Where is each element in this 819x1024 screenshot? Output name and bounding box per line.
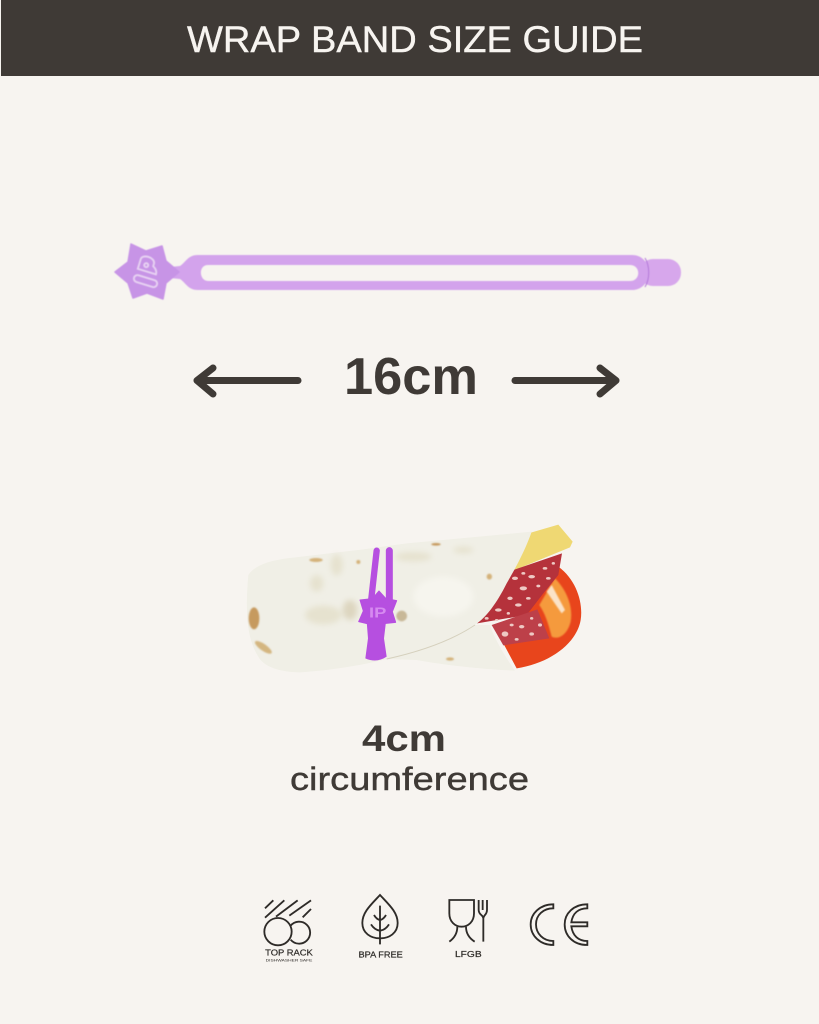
header banner <box>1 0 819 76</box>
icon: BPA free leaf <box>358 895 403 960</box>
band tab end <box>640 259 681 286</box>
arrow left <box>197 368 298 394</box>
tortilla <box>247 532 532 672</box>
tomato flesh <box>539 578 571 638</box>
salami front <box>492 609 549 645</box>
icon: LFGB food safe glass and fork <box>449 900 487 959</box>
icon: BPA free leaf: BPA FREE <box>358 950 403 960</box>
wrap band, flat <box>115 244 681 299</box>
band lower tab <box>365 622 387 660</box>
star logo <box>133 255 164 288</box>
icons row <box>264 895 587 963</box>
icon: top rack dishwasher safe: TOP RACK <box>265 947 313 957</box>
salami back <box>473 553 562 624</box>
icon: top rack dishwasher safe <box>264 900 313 963</box>
band star <box>359 591 397 632</box>
icon: CE mark <box>531 904 587 945</box>
arrow right <box>515 368 616 394</box>
icon: top rack dishwasher safe: DISHWASHER SAFE <box>266 958 313 963</box>
purple band on wrap <box>371 551 389 602</box>
measure label: 4cm: 4cm <box>362 718 446 759</box>
measure label: circumference: circumference <box>290 761 529 797</box>
length label: 16cm: 16cm <box>344 348 478 406</box>
wrap with band photo illustration <box>247 525 581 672</box>
tomato streak <box>547 585 565 613</box>
salami fat speckles <box>485 562 555 641</box>
band groove <box>645 258 649 287</box>
tortilla shading <box>305 547 473 624</box>
tomato <box>503 567 581 668</box>
icon: LFGB food safe glass and fork: LFGB <box>455 949 482 959</box>
tortilla fold line <box>387 625 475 659</box>
band loop <box>170 255 649 290</box>
star head <box>115 244 179 299</box>
tortilla toasted spots <box>249 543 492 661</box>
band star letters: IP <box>369 606 387 622</box>
cheese <box>513 525 573 571</box>
title: WRAP BAND SIZE GUIDE <box>187 19 643 60</box>
